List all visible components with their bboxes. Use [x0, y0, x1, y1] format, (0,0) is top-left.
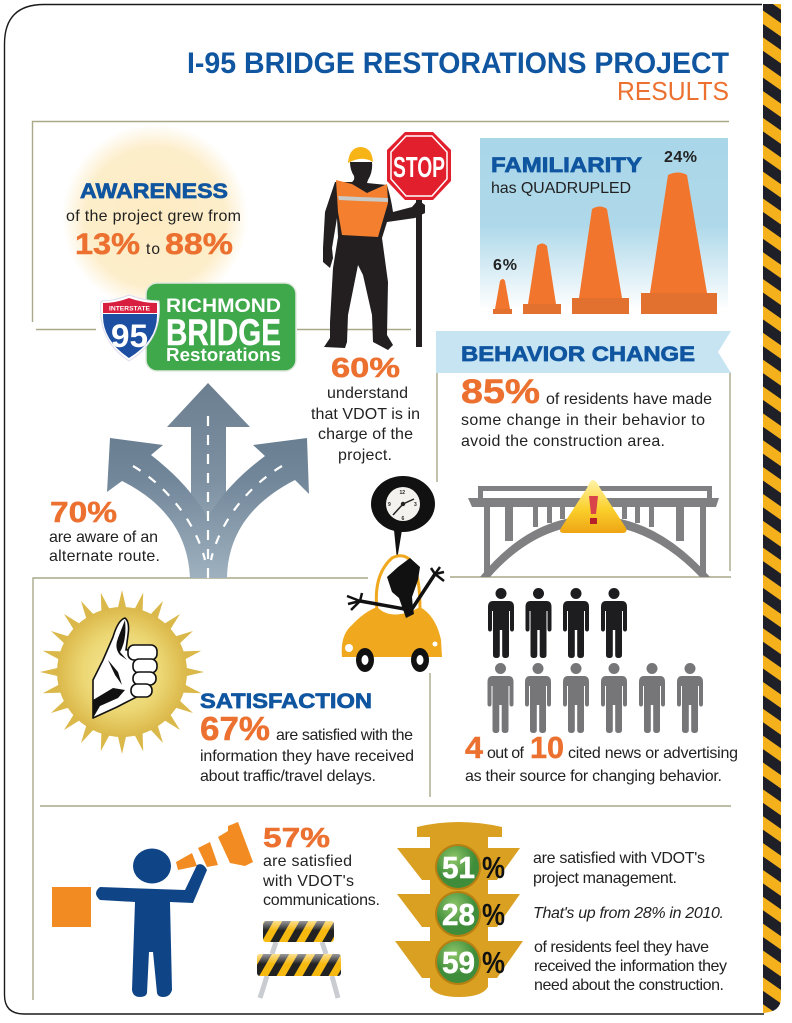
awareness glow — [62, 124, 248, 310]
satisfaction text: are satisfied with the — [276, 727, 413, 744]
4 out of 10 text: 4 — [465, 730, 484, 765]
title: I-95 BRIDGE RESTORATIONS PROJECT — [187, 47, 729, 80]
alternate route text — [49, 529, 160, 565]
67 percent figure: 67% — [200, 710, 270, 747]
information received text — [534, 939, 727, 994]
panel: satisfaction — [38, 588, 414, 785]
60 percent text: understand — [327, 385, 408, 402]
awareness figures — [75, 228, 233, 261]
lamp 59 percent: % — [482, 945, 505, 980]
green sign: RICHMOND — [166, 295, 281, 317]
information received text: of residents feel they have — [534, 939, 709, 956]
awareness figures: to — [146, 241, 160, 258]
hazard stripe border — [763, 4, 781, 1013]
icon: blue figure — [96, 848, 207, 997]
driver — [347, 558, 444, 618]
icon: barricade — [257, 921, 341, 998]
clock bubble: 9 — [388, 502, 391, 508]
sunburst — [38, 588, 206, 756]
icon: car with driver and clock — [342, 476, 444, 672]
icon: megaphone — [176, 822, 253, 870]
awareness figures: 88% — [165, 228, 233, 261]
behavior change text: some change in their behavior to — [461, 412, 705, 429]
communications text: with VDOT's — [262, 873, 354, 890]
6 percent label: 6% — [493, 257, 517, 274]
interstate shield: 95 — [111, 318, 148, 354]
4 out of 10 text: as their source for changing behavior. — [465, 768, 722, 785]
icon: people, grey row — [488, 663, 703, 733]
lamp 51 percent: % — [482, 850, 505, 885]
icon: bridge — [468, 486, 719, 577]
alternate route text: are aware of an — [49, 529, 158, 546]
interstate shield — [101, 295, 159, 361]
60 percent text: charge of the — [318, 426, 413, 443]
banner — [436, 331, 731, 373]
panel: news or advertising — [465, 588, 738, 785]
4 out of 10 text: out of — [487, 745, 525, 762]
car body — [342, 556, 442, 672]
85 percent figure: 85% — [461, 373, 540, 411]
clock bubble — [371, 476, 435, 560]
green sign: BRIDGE — [166, 312, 281, 353]
60 percent figure: 60% — [331, 352, 400, 383]
57 percent figure: 57% — [263, 822, 330, 853]
project management text — [533, 850, 705, 887]
communications text — [262, 853, 380, 909]
70 percent figure: 70% — [50, 497, 117, 529]
project management text: project management. — [533, 870, 677, 887]
cone chart — [493, 172, 717, 314]
behavior change heading: BEHAVIOR CHANGE — [461, 343, 695, 366]
familiarity text: has QUADRUPLED — [491, 180, 631, 197]
icon: warning triangle — [560, 480, 626, 533]
behavior change text — [461, 391, 712, 450]
satisfaction text: information they have received — [200, 748, 414, 765]
icon: worker silhouette — [323, 162, 425, 350]
4 out of 10 text: cited news or advertising — [568, 745, 738, 762]
familiarity heading: FAMILIARITY — [491, 154, 642, 177]
lamp 28 percent — [435, 891, 505, 937]
panel: traffic light — [395, 822, 727, 997]
icon: thumbs up badge — [38, 588, 206, 756]
awareness figures: 13% — [75, 228, 140, 261]
icon: orange square — [52, 887, 91, 927]
alternate route text: alternate route. — [49, 548, 160, 565]
lamp 59 percent: 59 — [442, 945, 475, 980]
awareness text: of the project grew from — [66, 208, 241, 225]
information received text: need about the construction. — [534, 977, 724, 994]
awareness heading: AWARENESS — [80, 180, 228, 203]
icon: hard hat — [348, 147, 373, 163]
traffic light housing — [395, 822, 523, 997]
green sign: Restorations — [166, 345, 281, 365]
panel: behavior change — [436, 331, 731, 577]
clock bubble: 6 — [402, 516, 404, 522]
satisfaction text — [200, 727, 414, 785]
clock bubble: 12 — [400, 490, 405, 496]
logo: Richmond Bridge Restorations — [101, 283, 296, 371]
panel: awareness — [62, 124, 248, 310]
2010 comparison text: That's up from 28% in 2010. — [533, 905, 724, 922]
information received text: received the information they — [534, 958, 727, 975]
panel: familiarity — [480, 138, 728, 315]
lamp 51 percent — [435, 844, 505, 890]
communications text: are satisfied — [263, 853, 352, 870]
sky background — [480, 138, 728, 315]
60 percent text: that VDOT is in — [311, 406, 420, 423]
project management text: are satisfied with VDOT's — [533, 850, 705, 867]
satisfaction heading: SATISFACTION — [200, 690, 372, 713]
24 percent label: 24% — [664, 149, 697, 166]
behavior change text: avoid the construction area. — [461, 433, 665, 450]
title: RESULTS — [617, 76, 729, 106]
hand — [93, 618, 157, 718]
icon: people, black row — [488, 588, 627, 658]
satisfaction text: about traffic/travel delays. — [200, 768, 376, 785]
60 percent text: project. — [338, 447, 392, 464]
icon: three-way road arrows — [107, 383, 309, 578]
4 out of 10 text: 10 — [530, 730, 564, 765]
title — [187, 47, 729, 106]
4 out of 10 text — [465, 730, 738, 785]
icon: stop sign — [387, 132, 451, 347]
green sign — [146, 283, 296, 371]
lamp 28 percent: 28 — [442, 897, 475, 932]
communications text: communications. — [263, 892, 380, 909]
panel: communications — [52, 822, 380, 998]
icon: stop sign: STOP — [393, 152, 445, 184]
interstate shield: INTERSTATE — [109, 306, 151, 312]
60 percent text — [311, 385, 420, 464]
clock bubble: 3 — [414, 502, 417, 508]
panel: VDOT worker — [311, 132, 451, 464]
lamp 59 percent — [435, 939, 505, 985]
panel: alternate route — [49, 383, 309, 578]
behavior change text: of residents have made — [546, 391, 712, 408]
lamp 28 percent: % — [482, 897, 505, 932]
lamp 51 percent: 51 — [442, 850, 475, 885]
